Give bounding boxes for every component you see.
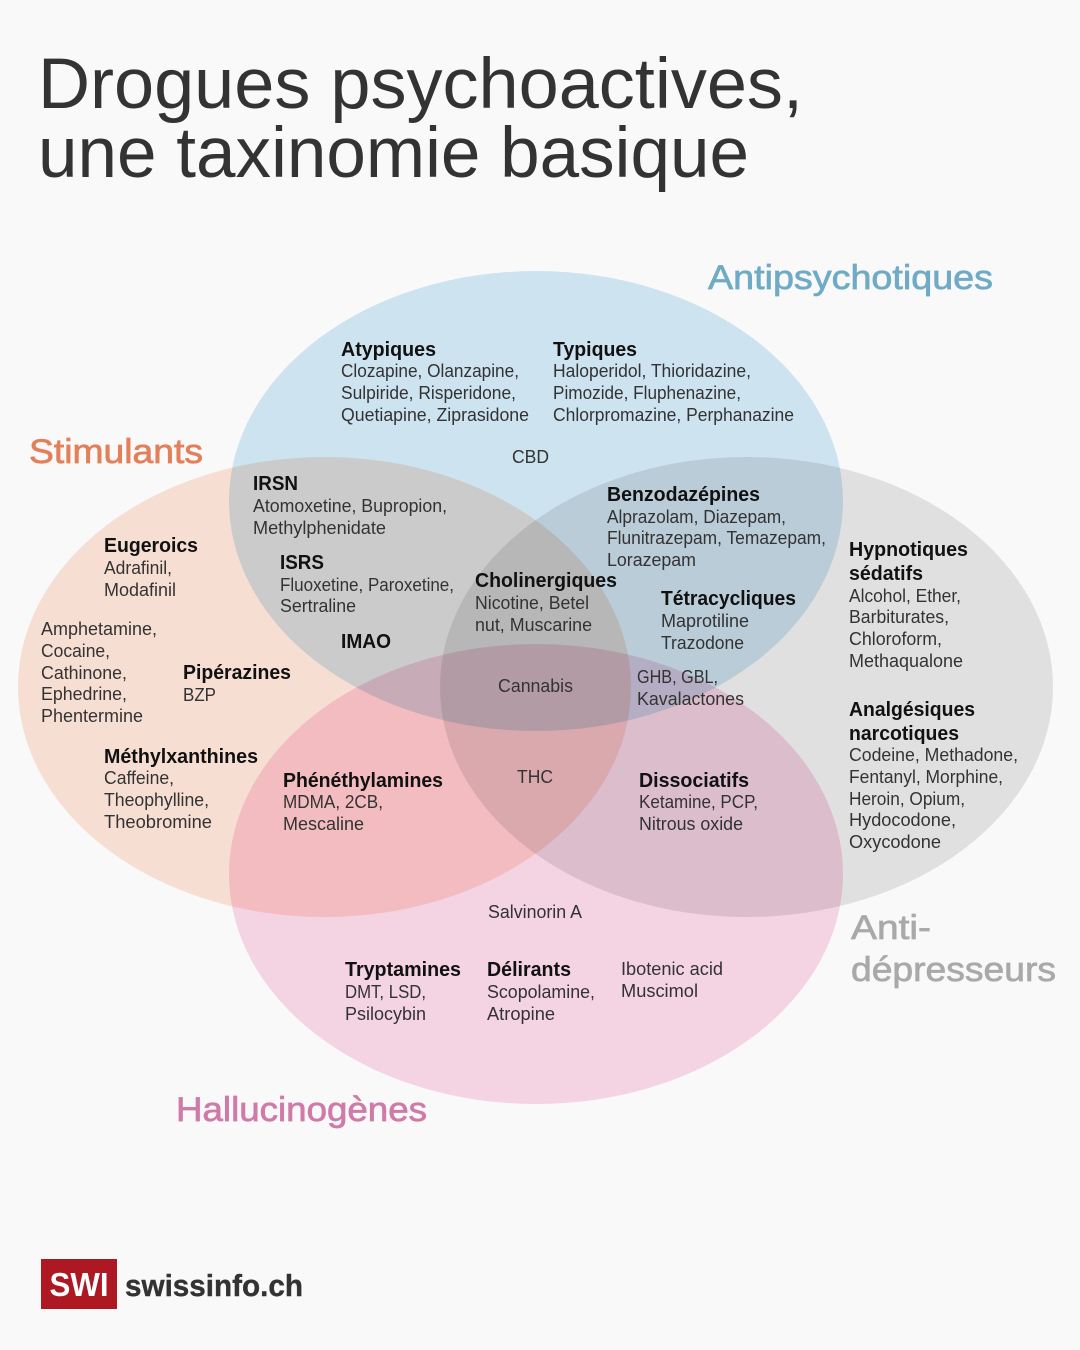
text block: Cholinergiques: Nicotine, Betel — [475, 593, 589, 613]
text block: Hypnotiques sédatifs — [849, 539, 968, 671]
text block: Dissociatifs — [639, 770, 758, 834]
text block: Méthylxanthines — [104, 746, 258, 832]
text block: amphetamines: Ephedrine, — [41, 684, 127, 704]
text block: Eugeroics: Adrafinil, — [104, 558, 172, 578]
ellipse: anti-dépresseurs — [440, 457, 1053, 917]
text block: Phénéthylamines: Phénéthylamines — [283, 770, 443, 792]
text block: Atypiques: Clozapine, Olanzapine, — [341, 361, 519, 381]
text block: Benzodazépines: Lorazepam — [607, 550, 696, 570]
text block: Analgésiques narcotiques — [849, 699, 1018, 852]
text block: Cholinergiques: Cholinergiques — [475, 570, 617, 592]
text block: Eugeroics: Modafinil — [104, 580, 176, 600]
text block: Typiques: Typiques — [553, 339, 637, 361]
text block: Délirants — [487, 959, 595, 1024]
text block: amphetamines: Amphetamine, — [41, 619, 157, 639]
category label: Anti-dépresseurs: dépresseurs — [851, 951, 1056, 989]
text block: Ibotenic acid, Muscimol: Ibotenic acid — [621, 959, 723, 979]
text block: ISRS — [280, 552, 454, 616]
text block: Hypnotiques sédatifs: sédatifs — [849, 563, 923, 585]
text block: Atypiques: Quetiapine, Ziprasidone — [341, 405, 529, 425]
label: THC: THC — [517, 767, 553, 787]
logo: SWI swissinfo.ch — [41, 1259, 303, 1309]
text block: IRSN: IRSN — [253, 473, 298, 495]
title: une taxinomie basique — [38, 114, 749, 193]
text block: Hypnotiques sédatifs: Alcohol, Ether, — [849, 586, 961, 606]
text block: Tétracycliques: Maprotiline — [661, 611, 749, 631]
logo mark: SWI: SWI — [50, 1266, 108, 1303]
title: Drogues psychoactives, — [38, 45, 803, 124]
text block: Hypnotiques sédatifs: Barbiturates, — [849, 607, 949, 627]
text block: amphetamines — [41, 619, 157, 726]
text block: Pipérazines: Pipérazines — [183, 662, 291, 684]
text block: Analgésiques narcotiques: Oxycodone — [849, 832, 941, 852]
text block: Délirants: Délirants — [487, 959, 571, 981]
text block: Pipérazines — [183, 662, 291, 705]
text block: Tétracycliques — [661, 588, 796, 653]
text block: Atypiques — [341, 339, 529, 425]
text block: Tétracycliques: Trazodone — [661, 633, 744, 653]
text block: Analgésiques narcotiques: Hydocodone, — [849, 810, 956, 830]
text block: Méthylxanthines: Theobromine — [104, 812, 212, 832]
ellipse: stimulants — [18, 457, 631, 917]
text block: Atypiques: Sulpiride, Risperidone, — [341, 383, 516, 403]
text block: Typiques: Haloperidol, Thioridazine, — [553, 361, 751, 381]
text block: Dissociatifs: Dissociatifs — [639, 770, 749, 792]
ellipse: hallucinogènes — [229, 644, 843, 1104]
venn diagram: four overlapping ellipses — [18, 271, 1053, 1104]
text block: Phénéthylamines — [283, 770, 443, 834]
text block: IRSN: Atomoxetine, Bupropion, — [253, 496, 447, 516]
logo wordmark: swissinfo.ch — [125, 1268, 303, 1303]
text block: Analgésiques narcotiques: Codeine, Methadone, — [849, 745, 1018, 765]
text block: Ibotenic acid, Muscimol: Muscimol — [621, 981, 698, 1001]
text block: Pipérazines: BZP — [183, 685, 216, 705]
category label: Anti-dépresseurs — [851, 909, 1056, 989]
text block: amphetamines: Cathinone, — [41, 663, 127, 683]
text block: Délirants: Atropine — [487, 1004, 555, 1024]
text block: Eugeroics: Eugeroics — [104, 535, 198, 557]
text block: Atypiques: Atypiques — [341, 339, 436, 361]
text block: Tryptamines: DMT, LSD, — [345, 982, 426, 1002]
text block: GHB, GBL, Kavalactones — [637, 667, 744, 709]
text block: Benzodazépines: Flunitrazepam, Temazepam, — [607, 528, 826, 548]
category label: Antipsychotiques: Antipsychotiques — [708, 259, 993, 297]
text block: Tryptamines: Tryptamines — [345, 959, 461, 981]
text block: Délirants: Scopolamine, — [487, 982, 595, 1002]
text block: ISRS: Sertraline — [280, 596, 356, 616]
text block: Analgésiques narcotiques: Heroin, Opium, — [849, 789, 965, 809]
text block: Méthylxanthines: Caffeine, — [104, 768, 174, 788]
text block: GHB, GBL, Kavalactones: Kavalactones — [637, 689, 744, 709]
text block: IRSN — [253, 473, 447, 538]
category label: Anti-dépresseurs: Anti- — [851, 909, 931, 947]
text block: IRSN: Methylphenidate — [253, 518, 386, 538]
text block: Phénéthylamines: MDMA, 2CB, — [283, 792, 383, 812]
ellipse: antipsychotiques — [229, 271, 843, 731]
text block: Benzodazépines: Benzodazépines — [607, 484, 760, 506]
text block: GHB, GBL, Kavalactones: GHB, GBL, — [637, 667, 718, 687]
logo mark: SWI — [41, 1259, 117, 1309]
text block: Analgésiques narcotiques: Analgésiques — [849, 699, 975, 721]
label: CBD: CBD — [512, 447, 549, 467]
text block: Phénéthylamines: Mescaline — [283, 814, 364, 834]
label: Cannabis: Cannabis — [498, 676, 573, 696]
text block: Typiques: Chlorpromazine, Perphanazine — [553, 405, 794, 425]
text block: Hypnotiques sédatifs: Methaqualone — [849, 651, 963, 671]
text block: Analgésiques narcotiques: Fentanyl, Morphine, — [849, 767, 1003, 787]
label: Salvinorin A: Salvinorin A — [488, 902, 582, 922]
text block: Analgésiques narcotiques: narcotiques — [849, 723, 959, 745]
text block: Dissociatifs: Ketamine, PCP, — [639, 792, 758, 812]
text block: Tryptamines: Psilocybin — [345, 1004, 426, 1024]
title — [38, 45, 803, 193]
text block: Benzodazépines: Alprazolam, Diazepam, — [607, 507, 786, 527]
text block: Typiques — [553, 339, 794, 425]
text block: amphetamines: Cocaine, — [41, 641, 110, 661]
text block: Cholinergiques — [475, 570, 617, 635]
text block: Hypnotiques sédatifs: Hypnotiques — [849, 539, 968, 561]
text block: ISRS: ISRS — [280, 552, 324, 574]
label: IMAO: IMAO — [341, 631, 391, 653]
text block: Tryptamines — [345, 959, 461, 1024]
text block: Méthylxanthines: Méthylxanthines — [104, 746, 258, 768]
text block: Hypnotiques sédatifs: Chloroform, — [849, 629, 942, 649]
text block: amphetamines: Phentermine — [41, 706, 143, 726]
text block: Benzodazépines — [607, 484, 826, 570]
category label: Stimulants: Stimulants — [29, 433, 203, 471]
text block: Méthylxanthines: Theophylline, — [104, 790, 209, 810]
text block: Typiques: Pimozide, Fluphenazine, — [553, 383, 741, 403]
text block: Eugeroics — [104, 535, 198, 600]
text block: ISRS: Fluoxetine, Paroxetine, — [280, 575, 454, 595]
text block: Cholinergiques: nut, Muscarine — [475, 615, 592, 635]
text block: Tétracycliques: Tétracycliques — [661, 588, 796, 610]
text block: Dissociatifs: Nitrous oxide — [639, 814, 743, 834]
text block: Ibotenic acid, Muscimol — [621, 959, 723, 1001]
category label: Hallucinogènes: Hallucinogènes — [176, 1091, 427, 1129]
